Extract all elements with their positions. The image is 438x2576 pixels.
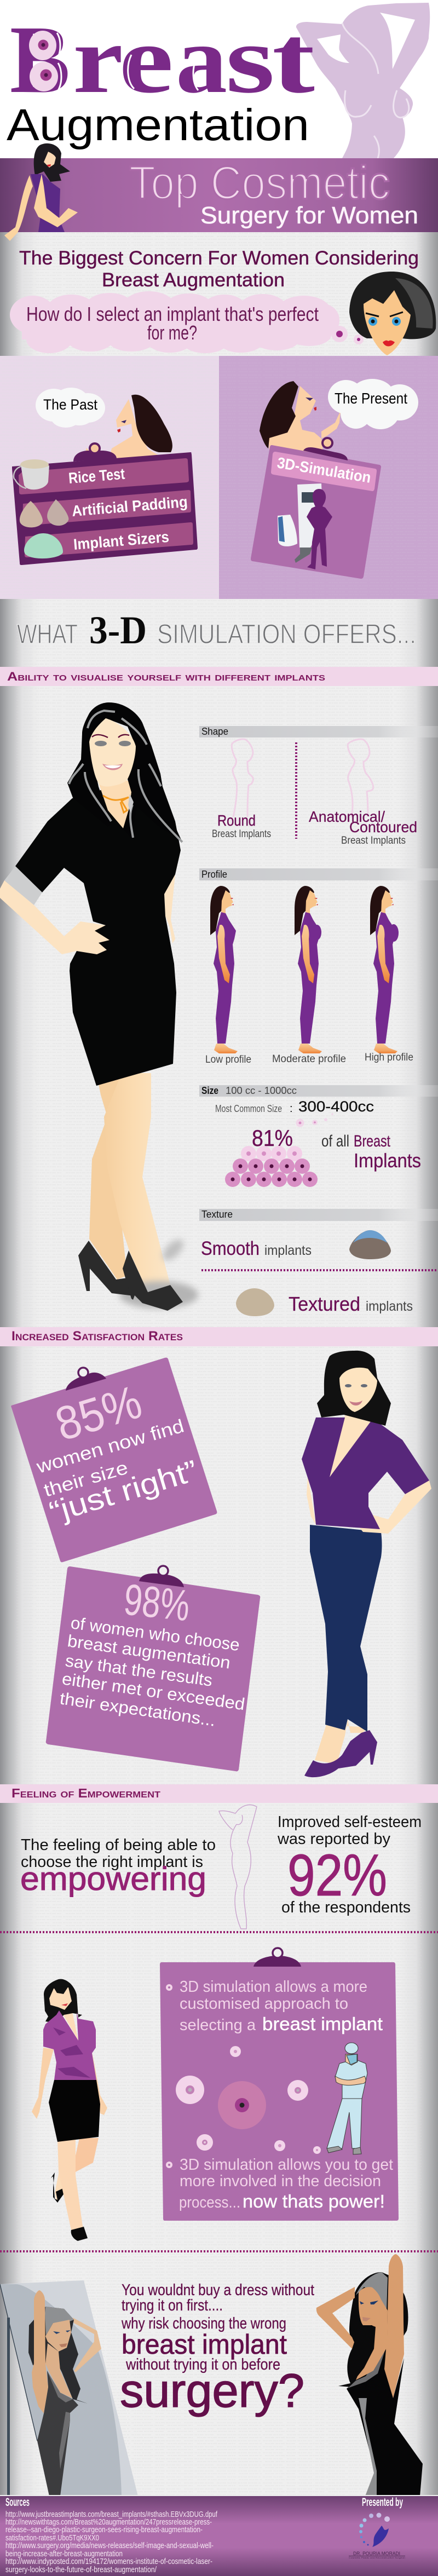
reflected hair bbox=[28, 2307, 88, 2404]
bullet: more involved: 3D simulation allows you to get bbox=[180, 2156, 393, 2174]
stat: 81%: 81% bbox=[252, 1125, 293, 1151]
figure: worried cartoon head bbox=[349, 272, 436, 355]
icon: 3D imaging machine bbox=[278, 483, 323, 563]
section bar: increased satisfaction: Increased Satisfaction Rates bbox=[11, 1329, 183, 1344]
note: 98%: their expectations... bbox=[59, 1688, 217, 1730]
front leg bbox=[57, 2138, 83, 2230]
heading: biggest concern: Breast Augmentation bbox=[102, 269, 285, 291]
closing question: You wouldnt buy a dress without bbox=[122, 2281, 314, 2299]
text: of all breast implants: Breast bbox=[354, 1132, 391, 1150]
sources: http://www.indyposted.com/194172/womens-institute-of-cosmetic-laser- bbox=[5, 2557, 212, 2566]
shoes bbox=[304, 1730, 377, 1777]
bullet: customised approach: breast implant bbox=[262, 2014, 383, 2034]
hair bbox=[67, 702, 182, 842]
bullet: customised approach: customised approach to bbox=[180, 1995, 348, 2013]
heading: what 3-D simulation offers: WHAT bbox=[17, 619, 78, 649]
stat: 92%: Improved self-esteem bbox=[278, 1813, 422, 1831]
text: empowering: empowering bbox=[20, 1860, 206, 1897]
divider bbox=[0, 1931, 438, 1933]
icon: implant sizer bbox=[24, 533, 63, 558]
chart: implant pile bbox=[225, 1146, 318, 1187]
bullet: customised approach: selecting a bbox=[180, 2016, 256, 2034]
bar: shape: Shape bbox=[201, 726, 228, 737]
chest bbox=[356, 2310, 388, 2380]
closing question: without trying it on before bbox=[125, 2356, 280, 2373]
icon: rice cup bbox=[14, 459, 49, 489]
bar: profile bbox=[199, 868, 438, 880]
back hair bbox=[338, 2272, 408, 2387]
label: textured implants bbox=[289, 1293, 413, 1315]
clip bbox=[253, 1948, 301, 1967]
necklace bbox=[103, 796, 129, 812]
skin: arms bbox=[0, 880, 110, 954]
figure: woman in black dress bbox=[0, 702, 198, 1311]
dress bbox=[347, 2347, 423, 2496]
section: profile bbox=[199, 868, 438, 1065]
divider bbox=[201, 1269, 438, 1271]
reflected dress bbox=[37, 2371, 78, 2496]
title: Breast: B bbox=[10, 6, 70, 113]
face bbox=[359, 2287, 388, 2325]
back shoe bbox=[51, 2172, 65, 2203]
raised arm bbox=[384, 2254, 404, 2398]
bullet: more involved: more involved in the decision bbox=[180, 2172, 381, 2190]
label: round: Round bbox=[217, 812, 256, 829]
reflected far arm bbox=[73, 2318, 101, 2372]
hair bbox=[44, 1979, 82, 2023]
face bbox=[49, 1987, 72, 2010]
sources: http://www.justbreastimplants.com/breast_implants/#sthash.EBVx3DUG.dpuf bbox=[5, 2510, 218, 2519]
speech cloud: The Present: The Present bbox=[335, 390, 407, 407]
list row: artificial padding bbox=[22, 490, 191, 526]
closing question: breast implant bbox=[122, 2329, 287, 2360]
note: 85%: 85% bbox=[49, 1375, 148, 1451]
text: most common size: : bbox=[290, 1103, 293, 1115]
figure: high profile bbox=[370, 886, 399, 1053]
sources: http://www.surgery.org/media/news-releases/self-image-and-sexual-well- bbox=[5, 2542, 214, 2550]
front shoe bbox=[71, 2227, 88, 2241]
note: 98%: 98% bbox=[122, 1575, 192, 1630]
text: of all breast implants: Implants bbox=[354, 1149, 421, 1172]
bar: texture: Texture bbox=[201, 1209, 233, 1220]
list row: rice test: Rice Test bbox=[68, 465, 125, 487]
speech cloud: The Present bbox=[328, 379, 418, 429]
note: 85%: their size bbox=[42, 1457, 130, 1501]
heading: biggest concern: The Biggest Concern For Women Considering bbox=[19, 247, 419, 269]
front hair bbox=[350, 2297, 376, 2382]
figure: woman in purple dress bbox=[4, 143, 78, 241]
section: shape bbox=[199, 726, 438, 846]
sources: satisfaction-rates#.Ubo5TqK9XX0 bbox=[5, 2534, 99, 2543]
figure: woman in purple blouse and black skirt bbox=[32, 1979, 107, 2241]
presented by: Presented by bbox=[362, 2496, 403, 2509]
label: round: Breast Implants bbox=[212, 828, 271, 840]
stat: 92%: was reported by bbox=[277, 1830, 390, 1848]
bullet: customised approach: 3D simulation allows a more bbox=[180, 1978, 367, 1996]
panel: the past bbox=[0, 356, 219, 599]
label: low profile: Low profile bbox=[205, 1054, 251, 1065]
figure: low profile bbox=[210, 886, 238, 1053]
outline: round implant profile bbox=[232, 739, 253, 817]
section: size bbox=[199, 1085, 438, 1187]
text: empowering: choose the right implant is bbox=[21, 1853, 203, 1871]
title: Breast: s bbox=[226, 6, 275, 113]
reflected chest bbox=[45, 2343, 72, 2398]
footer bbox=[0, 2495, 438, 2576]
icon: artificial padding bbox=[20, 499, 68, 527]
heading: biggest concern bbox=[19, 247, 419, 291]
logo: Dr. Pouria Moradi bbox=[349, 2513, 405, 2559]
logo: Dr. Pouria Moradi: Cosmetic Plastic and Reconstructive Surgeon bbox=[349, 2556, 405, 2559]
trousers bbox=[310, 1525, 382, 1732]
bar: size: 100 cc - 1000cc bbox=[226, 1085, 297, 1096]
label: smooth implants bbox=[201, 1238, 312, 1259]
reflected face bbox=[45, 2320, 71, 2352]
far arm bbox=[316, 2287, 355, 2349]
figure: moderate profile bbox=[295, 886, 322, 1053]
list row: rice test bbox=[19, 458, 189, 494]
sources: surgery-looks-to-the-future-of-breast-augmentation/ bbox=[5, 2566, 157, 2574]
figure: woman looking left bbox=[83, 395, 172, 459]
title: Augmentation: Augmentation bbox=[7, 100, 309, 150]
sources bbox=[5, 2496, 218, 2574]
label: moderate profile: Moderate profile bbox=[272, 1053, 346, 1065]
necklace bar bbox=[128, 794, 134, 813]
note: 98%: breast augmentation bbox=[66, 1631, 232, 1673]
stat: 92%: 92% bbox=[287, 1842, 387, 1908]
sources: http://newswithtags.com/Breast%20augmentation/247pressrelease-press- bbox=[5, 2518, 212, 2527]
figure: surgeon bbox=[327, 2043, 367, 2154]
bar: profile: Profile bbox=[201, 869, 227, 880]
icon: textured implant bbox=[236, 1288, 274, 1316]
neck and chest bbox=[99, 780, 131, 828]
bar: shape bbox=[199, 726, 438, 737]
note: 85%: women now find bbox=[34, 1416, 186, 1478]
figure: woman in purple top and navy trousers bbox=[302, 1351, 431, 1777]
panel: 3D simulation benefits bbox=[160, 1948, 399, 2221]
title: Breast: r bbox=[73, 6, 123, 113]
legs bbox=[315, 1719, 368, 1764]
text: most common size: 300-400cc bbox=[298, 1098, 374, 1115]
section bar: feeling of empowerment bbox=[0, 1784, 438, 1803]
closing question: why risk choosing the wrong bbox=[121, 2315, 286, 2332]
title: Breast: e bbox=[119, 6, 174, 113]
skin: arm and chest bbox=[355, 1480, 431, 1534]
label: high profile: High profile bbox=[365, 1052, 413, 1063]
skirt bbox=[49, 2080, 100, 2142]
sources: being-increase-after-breast-augmentation bbox=[5, 2550, 123, 2558]
list row: implant sizers bbox=[25, 522, 193, 557]
cuff bbox=[4, 866, 42, 905]
bar: texture bbox=[199, 1209, 438, 1221]
note: 85% bbox=[11, 1358, 217, 1562]
face bbox=[89, 718, 136, 787]
heading: Top Cosmetic: Top Cosmetic bbox=[129, 157, 390, 209]
reflected raised arm bbox=[32, 2290, 48, 2413]
list row: artificial padding: Artificial Padding bbox=[71, 493, 188, 520]
title: Breast: a bbox=[176, 6, 227, 113]
title: Breast: t bbox=[272, 6, 315, 113]
clipboard: 3D simulation bbox=[251, 438, 381, 579]
icon: smooth implant bbox=[349, 1230, 391, 1259]
question text: for me? bbox=[147, 321, 197, 344]
figure: mirror reflection bbox=[0, 2280, 138, 2496]
logo: Dr. Pouria Moradi: DR. POURIA MORADI bbox=[353, 2551, 400, 2556]
sources: release--san-diego-plastic-surgeon-sees-rising-breast-augmentation- bbox=[5, 2526, 203, 2534]
bullet: more involved bbox=[166, 2156, 393, 2211]
silhouette: woman facing machine bbox=[307, 489, 332, 569]
label: round bbox=[212, 812, 271, 840]
panel: the present bbox=[219, 356, 438, 599]
note: 98% bbox=[46, 1566, 260, 1771]
subtitle band bbox=[0, 143, 438, 241]
title: Breast bbox=[10, 6, 315, 113]
bullet: more involved: now thats power! bbox=[243, 2191, 385, 2211]
label: textured implants: Textured bbox=[289, 1293, 360, 1315]
figure: woman in black dress at mirror bbox=[316, 2254, 423, 2496]
label: anatomical bbox=[309, 808, 417, 846]
heading: what 3-D simulation offers bbox=[17, 608, 416, 652]
label: smooth implants: Smooth bbox=[201, 1238, 260, 1259]
icon: scattered implants bbox=[176, 2046, 321, 2154]
outline: woman figure bbox=[219, 1805, 257, 1929]
arms bbox=[32, 2048, 54, 2119]
section bar: increased satisfaction bbox=[0, 1327, 438, 1346]
divider bbox=[295, 742, 297, 839]
blouse bbox=[43, 2010, 96, 2080]
speech cloud: The Past bbox=[36, 388, 105, 428]
stat: 92%: of the respondents bbox=[281, 1899, 411, 1916]
thought cloud: question bbox=[10, 291, 339, 353]
clipboard: past methods bbox=[12, 443, 198, 565]
top bbox=[302, 1417, 429, 1529]
dress bbox=[15, 783, 181, 1086]
text: empowering: The feeling of being able to bbox=[21, 1836, 216, 1854]
header bbox=[7, 3, 430, 158]
question text: How do I select an implant that's perfect bbox=[26, 303, 319, 325]
label: anatomical: Breast Implants bbox=[341, 835, 406, 846]
thought bubbles bbox=[331, 326, 364, 344]
question text bbox=[26, 303, 319, 344]
label: textured implants: implants bbox=[366, 1299, 413, 1314]
face bbox=[339, 1368, 377, 1412]
heading: what 3-D simulation offers: 3-D bbox=[89, 608, 147, 652]
mouth bbox=[102, 764, 123, 770]
stat: 92% bbox=[277, 1813, 422, 1916]
clip bbox=[139, 1566, 184, 1587]
label: 3D-Simulation: 3D-Simulation bbox=[276, 454, 372, 486]
bar: size: Size bbox=[201, 1085, 218, 1096]
section bar: ability to visualise bbox=[0, 667, 438, 686]
shoes bbox=[78, 1241, 134, 1296]
clip bbox=[66, 1368, 106, 1391]
section bar: feeling of empowerment: Feeling of Empowerment bbox=[11, 1786, 160, 1800]
note: 98%: say that the results bbox=[64, 1651, 214, 1690]
text: most common size bbox=[215, 1098, 374, 1115]
section: texture bbox=[199, 1209, 438, 1316]
label: anatomical: Anatomical/ bbox=[309, 808, 385, 825]
hair highlights bbox=[69, 711, 182, 842]
text: most common size: Most Common Size bbox=[215, 1103, 282, 1114]
text: of all breast implants bbox=[321, 1132, 421, 1172]
note: 98%: either met or exceeded bbox=[61, 1669, 246, 1714]
closing question bbox=[120, 2281, 314, 2417]
section bar: ability to visualise: Ability to visualise yourself with different implants bbox=[7, 670, 325, 683]
label: smooth implants: implants bbox=[264, 1243, 312, 1258]
note: 85%: “just right” bbox=[45, 1454, 201, 1529]
eyes bbox=[95, 741, 107, 746]
dress highlight bbox=[359, 2398, 377, 2496]
note: 98%: of women who choose bbox=[70, 1613, 241, 1655]
bullet: more involved: process... bbox=[179, 2194, 240, 2211]
legs bbox=[89, 1073, 140, 1280]
mirror frame bbox=[0, 2284, 37, 2441]
sources: Sources bbox=[5, 2496, 30, 2509]
back leg bbox=[76, 2138, 99, 2172]
closing question: surgery? bbox=[120, 2365, 304, 2417]
list row: implant sizers: Implant Sizers bbox=[73, 528, 170, 553]
neck bbox=[57, 2001, 78, 2041]
divider bbox=[0, 2250, 438, 2252]
shoe shadows bbox=[119, 1281, 198, 1309]
figure: woman looking right bbox=[260, 381, 341, 452]
bullet: customised approach bbox=[166, 1978, 383, 2034]
bubbles rising bbox=[296, 1113, 333, 1127]
outline: anatomical implant profile bbox=[348, 739, 373, 817]
label: anatomical: Contoured bbox=[349, 819, 417, 835]
bar: size bbox=[199, 1085, 438, 1097]
speech cloud: The Past: The Past bbox=[43, 396, 97, 413]
mirror bbox=[0, 2280, 138, 2496]
heading: Surgery for Women: Surgery for Women bbox=[200, 202, 418, 229]
closing question: trying it on first.... bbox=[122, 2297, 223, 2314]
text: empowering bbox=[20, 1836, 216, 1897]
text: of all breast implants: of all bbox=[321, 1132, 349, 1150]
hair bbox=[317, 1351, 391, 1426]
silhouette: woman bbox=[296, 3, 430, 158]
